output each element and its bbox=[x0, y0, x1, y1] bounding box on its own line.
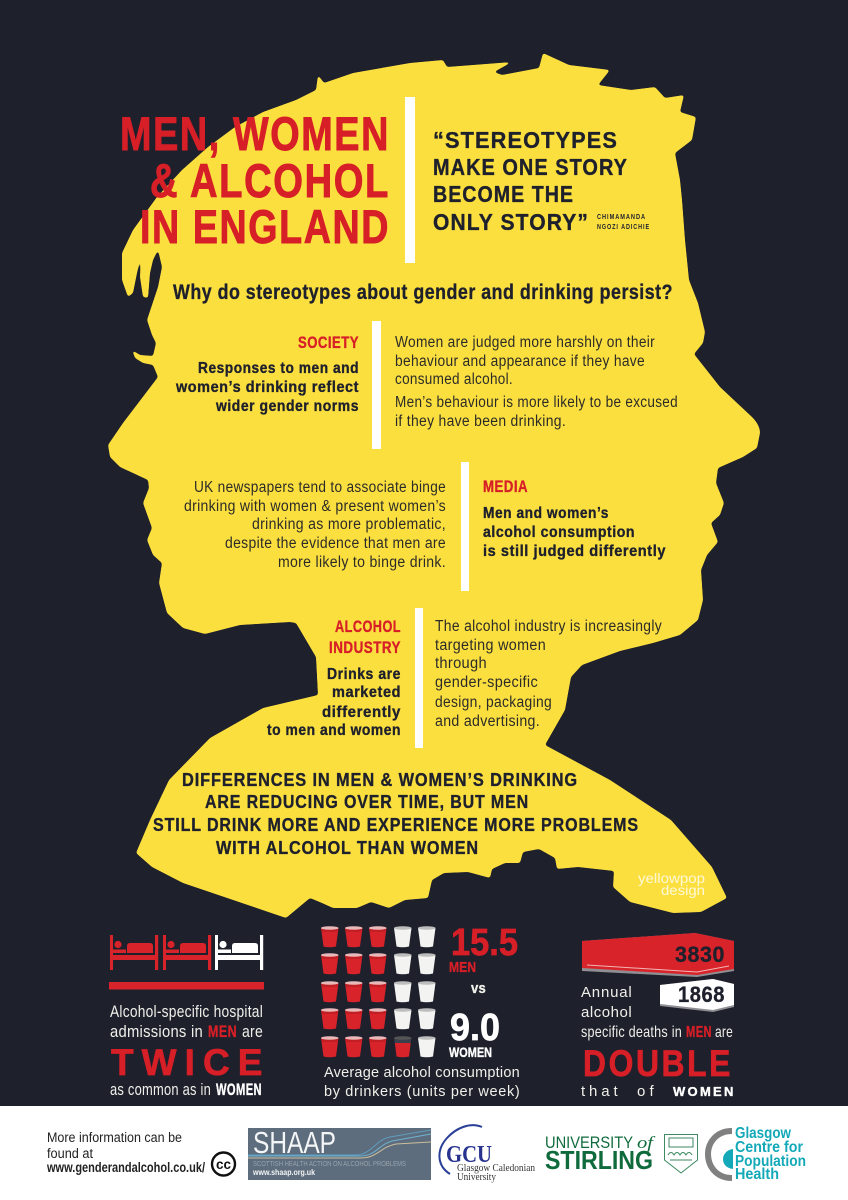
twice: TWICE bbox=[111, 1042, 263, 1083]
men value: MEN bbox=[449, 959, 476, 976]
conclusion statement: WITH ALCOHOL THAN WOMEN bbox=[216, 837, 479, 858]
head silhouette bbox=[108, 53, 760, 918]
quote: NGOZI ADICHIE bbox=[597, 224, 650, 231]
admissions text: Alcohol-specific hospital bbox=[110, 1002, 263, 1021]
industry body: through bbox=[435, 655, 487, 672]
society divider bbox=[372, 321, 381, 449]
admissions text: admissions in bbox=[110, 1022, 203, 1041]
logo: GCU bbox=[439, 1125, 535, 1183]
that of women: that bbox=[581, 1083, 619, 1100]
icon: white coffin 1868: 1868 bbox=[678, 982, 725, 1007]
media body: drinking with women & present women’s bbox=[184, 498, 446, 515]
icon: creative commons bbox=[212, 1152, 235, 1176]
more information text: www.genderandalcohol.co.uk/ bbox=[46, 1160, 205, 1175]
industry body: The alcohol industry is increasingly bbox=[435, 618, 662, 635]
cups grid bbox=[321, 926, 436, 1057]
quote: “STEREOTYPES bbox=[433, 127, 618, 153]
double: DOUBLE bbox=[583, 1043, 733, 1084]
title divider bbox=[405, 97, 415, 263]
quote: BECOME THE bbox=[433, 181, 574, 207]
consumption caption: Average alcohol consumption bbox=[324, 1065, 520, 1081]
conclusion statement: STILL DRINK MORE AND EXPERIENCE MORE PROBLEMS bbox=[153, 814, 639, 835]
industry body: and advertising. bbox=[435, 713, 540, 730]
section: media bbox=[184, 462, 666, 591]
section: society bbox=[175, 321, 678, 449]
women value: WOMEN bbox=[449, 1044, 492, 1060]
industry heading bbox=[329, 618, 401, 657]
conclusion statement bbox=[153, 769, 639, 858]
quote bbox=[433, 127, 650, 235]
industry body: targeting women bbox=[435, 637, 546, 654]
quote: CHIMAMANDA bbox=[597, 214, 646, 221]
media divider bbox=[461, 462, 469, 591]
industry heading: ALCOHOL bbox=[335, 618, 401, 636]
logo: SHAAP: SHAAP bbox=[253, 1125, 336, 1160]
that of women bbox=[581, 1083, 734, 1100]
society heading: SOCIETY bbox=[298, 334, 359, 352]
society body: behaviour and appearance if they have bbox=[395, 353, 645, 370]
logo: University of Stirling: UNIVERSITY bbox=[545, 1133, 633, 1152]
panel: hospital admissions bbox=[109, 935, 264, 1099]
logo: GCU: University bbox=[457, 1171, 496, 1183]
more information text: More information can be bbox=[47, 1130, 182, 1145]
subheading: Why do stereotypes about gender and drinking persist? bbox=[173, 281, 673, 304]
title: & ALCOHOL bbox=[150, 154, 390, 207]
logo: SHAAP: www.shaap.org.uk bbox=[252, 1168, 315, 1177]
industry heading: INDUSTRY bbox=[329, 639, 401, 657]
more information text: found at bbox=[47, 1146, 93, 1161]
industry summary: differently bbox=[322, 704, 401, 721]
logo: GCU: Glasgow Caledonian bbox=[457, 1162, 535, 1174]
consumption caption bbox=[324, 1065, 520, 1100]
conclusion statement: ARE REDUCING OVER TIME, BUT MEN bbox=[205, 791, 529, 812]
industry body: design, packaging bbox=[435, 694, 552, 711]
industry summary: to men and women bbox=[267, 722, 401, 739]
society summary: women’s drinking reflect bbox=[175, 379, 359, 396]
icon: red coffin 3830 bbox=[582, 933, 734, 977]
deaths text: Annual bbox=[581, 984, 632, 1001]
icon: red coffin 3830: 3830 bbox=[675, 942, 725, 967]
society body: Women are judged more harshly on their bbox=[395, 334, 655, 351]
logo: Glasgow Centre for Population Health: Population bbox=[735, 1153, 806, 1170]
vs: vs bbox=[471, 980, 486, 997]
society body: consumed alcohol. bbox=[395, 371, 513, 388]
designer credit: yellowpop bbox=[638, 870, 705, 886]
icon: white coffin 1868 bbox=[660, 979, 734, 1012]
industry body: gender-specific bbox=[435, 674, 538, 691]
society body: Men’s behaviour is more likely to be excused bbox=[395, 394, 678, 411]
industry divider bbox=[415, 608, 423, 748]
admissions text: MEN bbox=[208, 1022, 237, 1041]
logo: Glasgow Centre for Population Health: Glasgow bbox=[735, 1125, 792, 1142]
media body: UK newspapers tend to associate binge bbox=[194, 479, 446, 496]
consumption caption: by drinkers (units per week) bbox=[324, 1084, 520, 1100]
title: IN ENGLAND bbox=[140, 200, 390, 253]
logo: SHAAP bbox=[248, 1125, 431, 1180]
deaths text: are bbox=[715, 1024, 733, 1041]
logo: SHAAP: SCOTTISH HEALTH ACTION ON ALCOHOL PROBLEMS bbox=[253, 1159, 406, 1168]
deaths text: alcohol bbox=[581, 1004, 632, 1021]
media heading: MEDIA bbox=[483, 478, 528, 496]
society body: if they have been drinking. bbox=[395, 413, 566, 430]
logo: University of Stirling: STIRLING bbox=[545, 1145, 653, 1175]
footer background bbox=[0, 1106, 848, 1200]
title: MEN, WOMEN bbox=[120, 107, 390, 160]
logo: GCU: GCU bbox=[446, 1142, 492, 1168]
as common as in women: as common as in bbox=[110, 1080, 211, 1099]
designer credit: design bbox=[661, 882, 705, 898]
designer credit bbox=[638, 870, 705, 898]
media body: despite the evidence that men are bbox=[225, 535, 446, 552]
icon: creative commons: cc bbox=[216, 1156, 231, 1172]
society summary: Responses to men and bbox=[198, 360, 359, 377]
industry summary: marketed bbox=[332, 684, 401, 701]
media summary: alcohol consumption bbox=[483, 524, 635, 541]
as common as in women: WOMEN bbox=[216, 1080, 262, 1099]
women value: 9.0 bbox=[450, 1007, 500, 1049]
conclusion statement: DIFFERENCES IN MEN & WOMEN’S DRINKING bbox=[182, 769, 578, 790]
society summary: wider gender norms bbox=[215, 398, 359, 415]
admissions text bbox=[110, 1002, 263, 1041]
logo: University of Stirling bbox=[545, 1133, 656, 1175]
men value: 15.5 bbox=[451, 922, 518, 964]
quote: ONLY STORY” bbox=[433, 209, 589, 235]
media body: more likely to binge drink. bbox=[278, 554, 446, 571]
logo: Stirling crest bbox=[664, 1134, 698, 1173]
industry summary: Drinks are bbox=[327, 666, 401, 683]
deaths text bbox=[581, 984, 733, 1041]
more information text bbox=[46, 1130, 205, 1175]
media body: drinking as more problematic, bbox=[252, 516, 446, 533]
quote: MAKE ONE STORY bbox=[433, 154, 628, 180]
section: alcohol industry bbox=[267, 608, 662, 748]
media summary bbox=[483, 505, 666, 560]
society summary bbox=[175, 360, 359, 415]
that of women: WOMEN bbox=[673, 1084, 734, 1099]
media summary: is still judged differently bbox=[483, 543, 666, 560]
industry body bbox=[435, 618, 662, 730]
deaths text: specific deaths in bbox=[581, 1024, 682, 1041]
panel: alcohol deaths bbox=[581, 933, 734, 1100]
logo: Glasgow Centre for Population Health bbox=[708, 1125, 806, 1183]
logo: Glasgow Centre for Population Health: Centre for bbox=[735, 1139, 803, 1156]
society body bbox=[395, 334, 678, 430]
icon: three beds bbox=[110, 935, 263, 970]
media summary: Men and women’s bbox=[483, 505, 609, 522]
that of women: of bbox=[637, 1083, 655, 1100]
red rule bbox=[109, 982, 264, 990]
logo: Glasgow Centre for Population Health: Health bbox=[735, 1166, 779, 1183]
footer panel bbox=[0, 1106, 848, 1200]
media body bbox=[184, 479, 446, 571]
deaths text: MEN bbox=[686, 1024, 712, 1041]
industry summary bbox=[267, 666, 401, 739]
panel: alcohol consumption bbox=[321, 922, 520, 1100]
admissions text: are bbox=[242, 1022, 263, 1041]
logo: University of Stirling: of bbox=[637, 1133, 656, 1152]
title bbox=[120, 107, 390, 253]
